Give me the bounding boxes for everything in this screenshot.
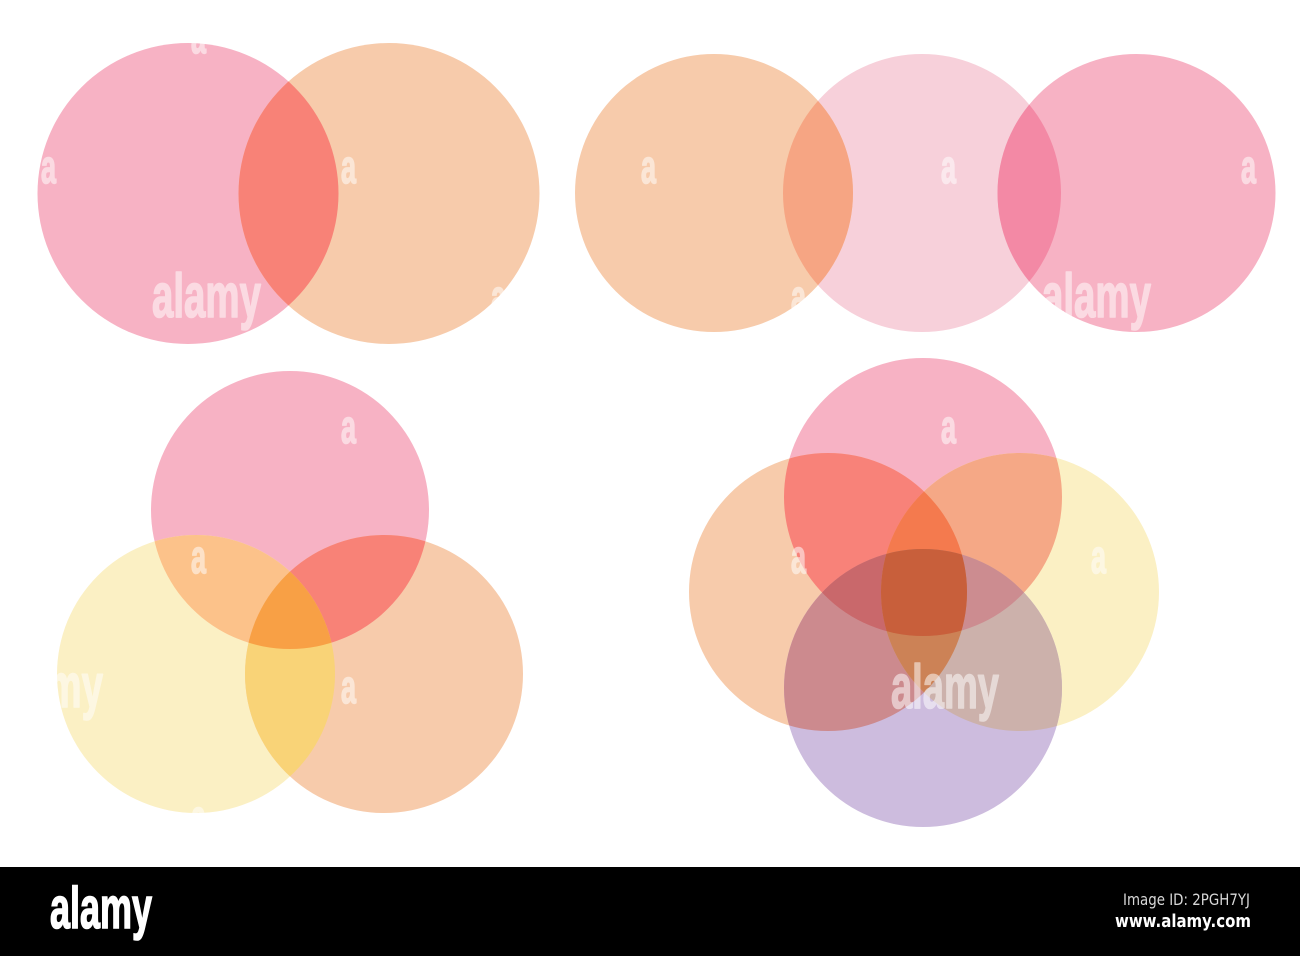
circle: pink bbox=[38, 43, 338, 344]
watermark text: a bbox=[791, 530, 806, 583]
panel: four-circle Venn diagram bbox=[689, 358, 1159, 827]
circle: pink bbox=[784, 358, 1062, 636]
watermark text: a bbox=[341, 660, 356, 713]
footer logo: alamy bbox=[50, 876, 152, 941]
watermark text: a bbox=[791, 270, 806, 323]
watermark text: a bbox=[41, 140, 56, 193]
overlap: pink and orange bbox=[248, 535, 426, 642]
overlap: orange and light pink bbox=[783, 101, 853, 285]
overlap: all four circles bbox=[881, 549, 967, 636]
overlap: purple, pink and orange bbox=[822, 554, 886, 631]
watermark text: a bbox=[341, 400, 356, 453]
overlap: yellow and orange bbox=[245, 572, 335, 776]
watermark text: a bbox=[191, 530, 206, 583]
circle: orange bbox=[245, 535, 523, 813]
watermark text: a bbox=[191, 790, 206, 843]
image id: Image ID: 2PGH7YJ bbox=[1123, 890, 1250, 909]
circle: yellow bbox=[881, 453, 1159, 731]
circle: orange bbox=[689, 453, 967, 731]
circle: orange bbox=[575, 54, 853, 332]
overlap: purple, orange and yellow bbox=[881, 549, 967, 692]
circle: orange bbox=[238, 43, 540, 344]
panel: three-circle chain Venn diagram bbox=[575, 54, 1276, 332]
overlap: light pink and pink bbox=[998, 104, 1061, 282]
footer bar bbox=[0, 867, 1300, 956]
circle: light pink bbox=[783, 54, 1061, 332]
overlap: purple and orange bbox=[784, 554, 924, 731]
watermark text: a bbox=[341, 140, 356, 193]
watermark text: a bbox=[491, 270, 506, 323]
overlap: pink and orange bbox=[784, 453, 924, 592]
website url: www.alamy.com bbox=[1115, 911, 1251, 932]
watermark text: alamy bbox=[152, 262, 261, 331]
circle: purple bbox=[784, 549, 1062, 827]
watermark text: a bbox=[941, 140, 956, 193]
circle: yellow bbox=[57, 535, 335, 813]
overlap: pink and orange bbox=[238, 82, 338, 306]
overlap: purple, pink and yellow bbox=[904, 550, 1024, 630]
watermark text: a bbox=[191, 10, 206, 63]
overlap: pink and yellow bbox=[154, 535, 290, 642]
overlap: pink and yellow bbox=[886, 453, 1062, 592]
panel: three-circle triangular Venn diagram bbox=[57, 371, 523, 813]
overlap: purple and yellow bbox=[886, 554, 1062, 731]
circle: pink bbox=[151, 371, 429, 649]
circle: pink bbox=[998, 54, 1276, 332]
watermark text: a bbox=[941, 400, 956, 453]
overlap: pink, orange and yellow bbox=[886, 492, 962, 554]
panel: two-circle Venn diagram bbox=[38, 43, 540, 344]
watermark text: a bbox=[641, 140, 656, 193]
watermark text: alamy bbox=[1042, 262, 1151, 331]
watermark text: a bbox=[1091, 530, 1106, 583]
watermark text: a bbox=[1241, 140, 1256, 193]
watermark text: alamy bbox=[891, 653, 999, 722]
overlap: pink, yellow and orange bbox=[248, 572, 332, 649]
